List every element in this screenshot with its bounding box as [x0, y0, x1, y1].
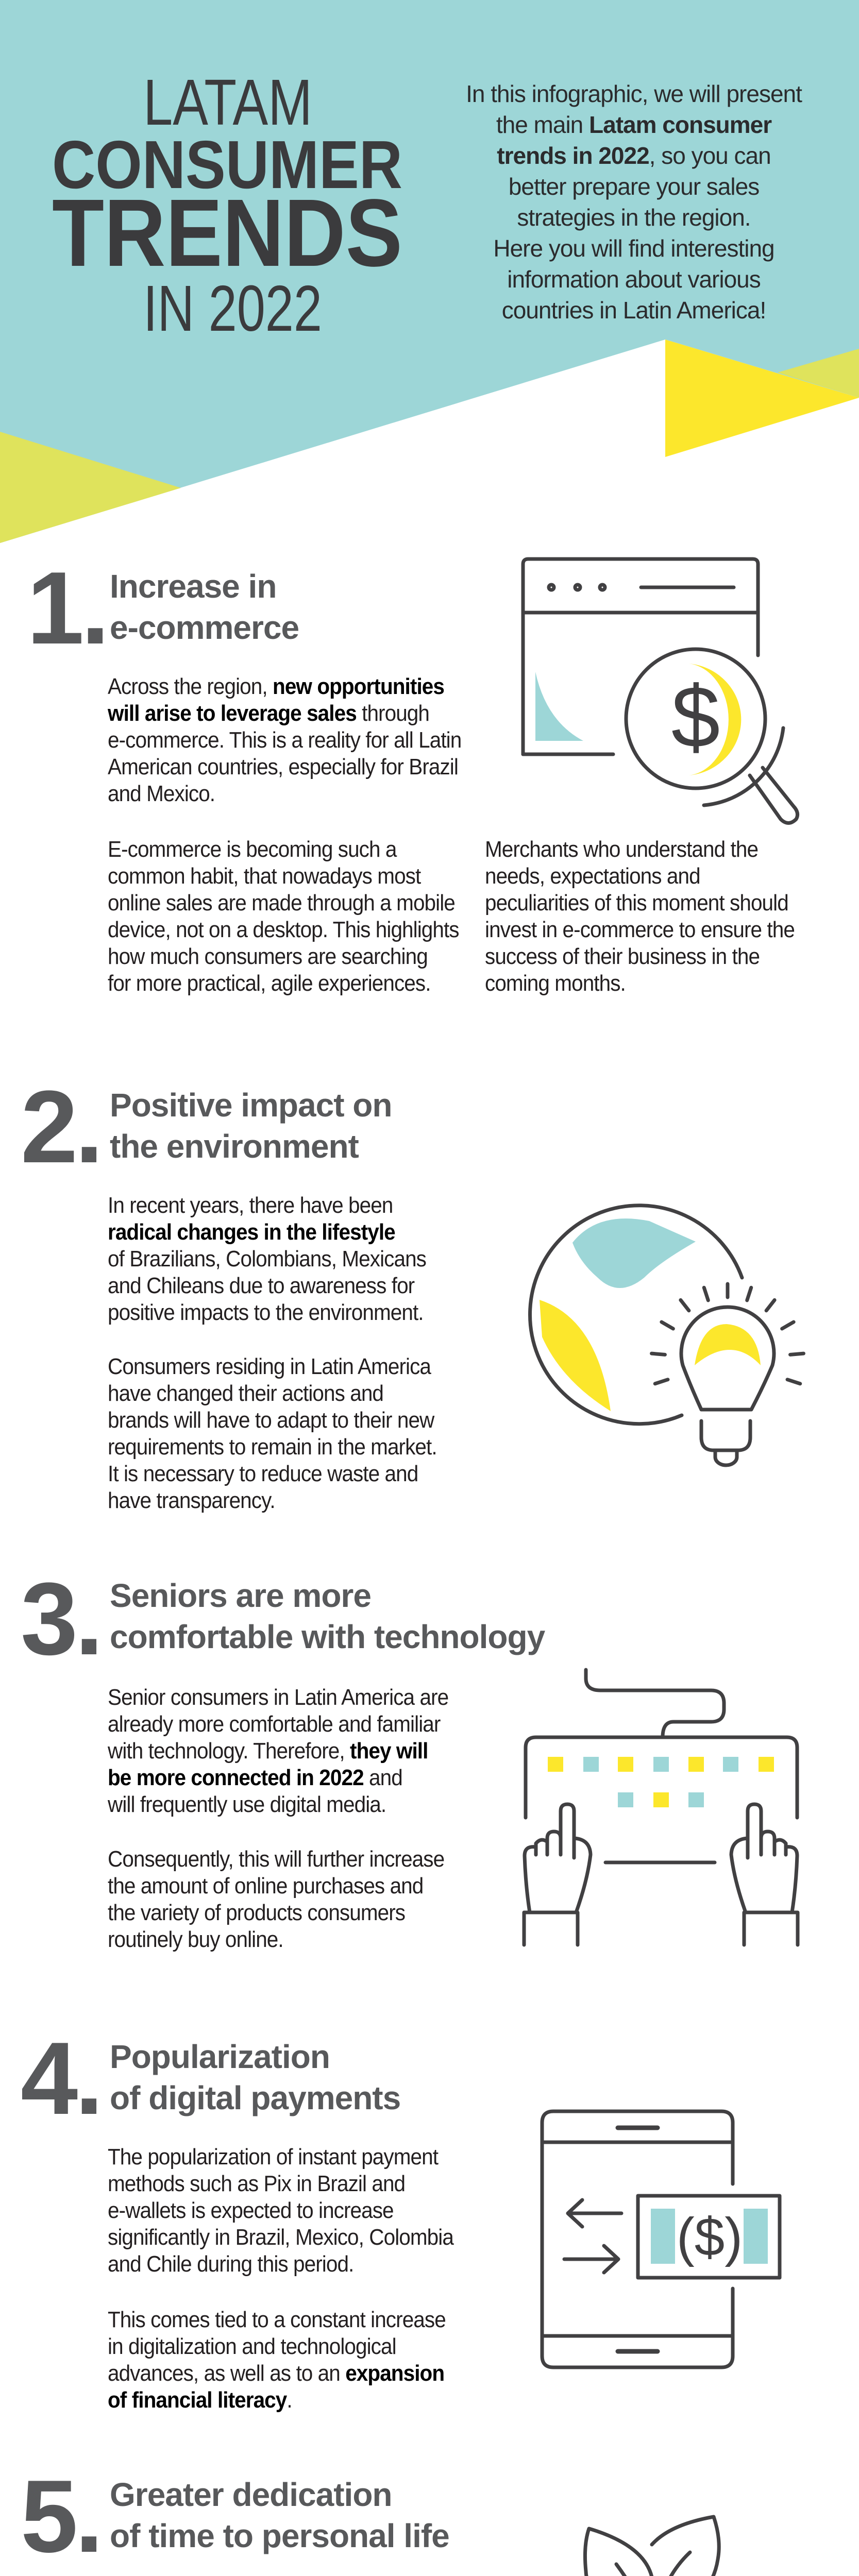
- section 2 number: 2.: [21, 1070, 100, 1184]
- section 2 paragraph 1: and Chileans due to awareness for: [108, 1273, 414, 1298]
- section 4 number: 4.: [21, 2021, 100, 2136]
- title: IN 2022: [143, 272, 322, 345]
- icon: keyboard with hands: [523, 1668, 800, 1946]
- section 2 heading: the environment: [110, 1128, 359, 1165]
- section 1 paragraph 1: will arise to leverage sales through: [108, 701, 429, 726]
- section 3 paragraph 1: with technology. Therefore, they will: [108, 1738, 428, 1764]
- section 1 paragraph 1: American countries, especially for Brazil: [108, 754, 458, 779]
- section 1 paragraph 3: [485, 837, 795, 996]
- section 4 paragraph 1: and Chile during this period.: [108, 2251, 353, 2277]
- icon: phone with money: [540, 2109, 781, 2369]
- section 2 paragraph 2: Consumers residing in Latin America: [108, 1354, 431, 1379]
- header background and title: [0, 0, 859, 543]
- section 5 heading: of time to personal life: [110, 2517, 449, 2554]
- section 5 heading: [110, 2476, 449, 2554]
- section 1 heading: Increase in: [110, 568, 276, 605]
- section 2 paragraph 1: In recent years, there have been: [108, 1193, 393, 1218]
- section 3 paragraph 2: Consequently, this will further increase: [108, 1846, 444, 1872]
- intro text: information about various: [507, 266, 761, 293]
- icon: tea cup with leaves: [583, 2515, 721, 2576]
- section 4 paragraph 1: methods such as Pix in Brazil and: [108, 2171, 405, 2196]
- intro text: [466, 80, 802, 324]
- section 4 paragraph 1: significantly in Brazil, Mexico, Colombia: [108, 2225, 453, 2250]
- section 2 paragraph 1: positive impacts to the environment.: [108, 1300, 424, 1325]
- section 2 paragraph 1: of Brazilians, Colombians, Mexicans: [108, 1246, 426, 1272]
- section 2 paragraph 2: have transparency.: [108, 1488, 275, 1513]
- section 1 number: 1.: [27, 551, 107, 666]
- section 1 paragraph 3: Merchants who understand the: [485, 837, 758, 862]
- section 2 heading: [110, 1087, 392, 1165]
- section 2 paragraph 2: requirements to remain in the market.: [108, 1434, 437, 1460]
- section 3 paragraph 2: [108, 1846, 444, 1952]
- title: TRENDS: [52, 180, 402, 286]
- section 4 paragraph 2: [108, 2307, 446, 2413]
- section 3 paragraph 1: Senior consumers in Latin America are: [108, 1685, 448, 1710]
- intro text: In this infographic, we will present: [466, 80, 802, 107]
- section 2 paragraph 2: have changed their actions and: [108, 1381, 383, 1406]
- section 1 paragraph 3: peculiarities of this moment should: [485, 890, 788, 916]
- section 4 paragraph 2: advances, as well as to an expansion: [108, 2361, 444, 2386]
- section 1 heading: [110, 568, 299, 646]
- section 2 paragraph 2: It is necessary to reduce waste and: [108, 1461, 418, 1486]
- section 3 paragraph 1: be more connected in 2022 and: [108, 1765, 402, 1790]
- section 4 paragraph 1: [108, 2144, 454, 2277]
- section 5 heading: Greater dedication: [110, 2476, 392, 2513]
- section 1 paragraph 3: success of their business in the: [485, 944, 760, 969]
- section 5 number: 5.: [21, 2459, 100, 2574]
- section 1 paragraph 2: online sales are made through a mobile: [108, 890, 455, 916]
- section 2 heading: Positive impact on: [110, 1087, 392, 1124]
- section 2 paragraph 1: [108, 1193, 426, 1325]
- section 3 number: 3.: [21, 1562, 100, 1676]
- icon: browser with magnifier: [521, 557, 800, 825]
- section 1 paragraph 1: e-commerce. This is a reality for all Latin: [108, 727, 461, 753]
- intro text: better prepare your sales: [509, 173, 759, 200]
- section 3 heading: comfortable with technology: [110, 1618, 545, 1655]
- section 1 paragraph 1: and Mexico.: [108, 781, 215, 806]
- section 1 paragraph 3: invest in e-commerce to ensure the: [485, 917, 795, 942]
- section 1 paragraph 1: [107, 674, 461, 806]
- section 1 paragraph 2: common habit, that nowadays most: [108, 863, 420, 889]
- section 1 paragraph 3: needs, expectations and: [485, 863, 700, 889]
- section 2 paragraph 2: brands will have to adapt to their new: [108, 1408, 434, 1433]
- section 4 paragraph 2: This comes tied to a constant increase: [108, 2307, 446, 2332]
- section 4 paragraph 2: in digitalization and technological: [108, 2334, 396, 2359]
- intro text: the main Latam consumer: [496, 111, 771, 138]
- section 1 paragraph 2: for more practical, agile experiences.: [108, 971, 431, 996]
- section 2 paragraph 2: [108, 1354, 437, 1513]
- intro text: strategies in the region.: [517, 204, 751, 231]
- section 1 paragraph 2: E-commerce is becoming such a: [108, 837, 397, 862]
- section 4 heading: [110, 2038, 400, 2116]
- section 1 paragraph 2: device, not on a desktop. This highlights: [108, 917, 459, 942]
- title: [52, 66, 402, 345]
- section 3 paragraph 1: will frequently use digital media.: [108, 1792, 386, 1817]
- section 3 paragraph 1: [108, 1685, 448, 1817]
- section 3 paragraph 2: the variety of products consumers: [108, 1900, 405, 1925]
- section 1 heading: e-commerce: [110, 609, 299, 646]
- section 3 paragraph 1: already more comfortable and familiar: [108, 1711, 440, 1737]
- section 4 paragraph 1: The popularization of instant payment: [108, 2144, 438, 2170]
- icon: browser with magnifier: $: [671, 668, 720, 766]
- section 4 heading: Popularization: [110, 2038, 330, 2075]
- section 2 paragraph 1: radical changes in the lifestyle: [108, 1219, 395, 1245]
- title: LATAM: [143, 66, 312, 139]
- section 1 paragraph 1: Across the region, new opportunities: [108, 674, 444, 699]
- section 1 paragraph 3: coming months.: [485, 971, 626, 996]
- intro text: countries in Latin America!: [502, 297, 766, 324]
- section 3 heading: Seniors are more: [110, 1577, 371, 1614]
- section 3 paragraph 2: the amount of online purchases and: [108, 1873, 423, 1899]
- intro text: Here you will find interesting: [493, 235, 774, 262]
- section 4 paragraph 1: e-wallets is expected to increase: [108, 2198, 394, 2223]
- title: CONSUMER: [52, 127, 402, 202]
- section 1 paragraph 2: how much consumers are searching: [108, 944, 428, 969]
- section 4 heading: of digital payments: [110, 2079, 400, 2116]
- section 4 paragraph 2: of financial literacy.: [108, 2387, 292, 2413]
- icon: phone with money: ($): [677, 2207, 743, 2267]
- section 1 paragraph 2: [108, 837, 459, 996]
- icon: globe and light bulb: [528, 1204, 805, 1467]
- intro text: trends in 2022, so you can: [497, 142, 771, 169]
- section 3 heading: [110, 1577, 545, 1655]
- section 3 paragraph 2: routinely buy online.: [108, 1927, 283, 1952]
